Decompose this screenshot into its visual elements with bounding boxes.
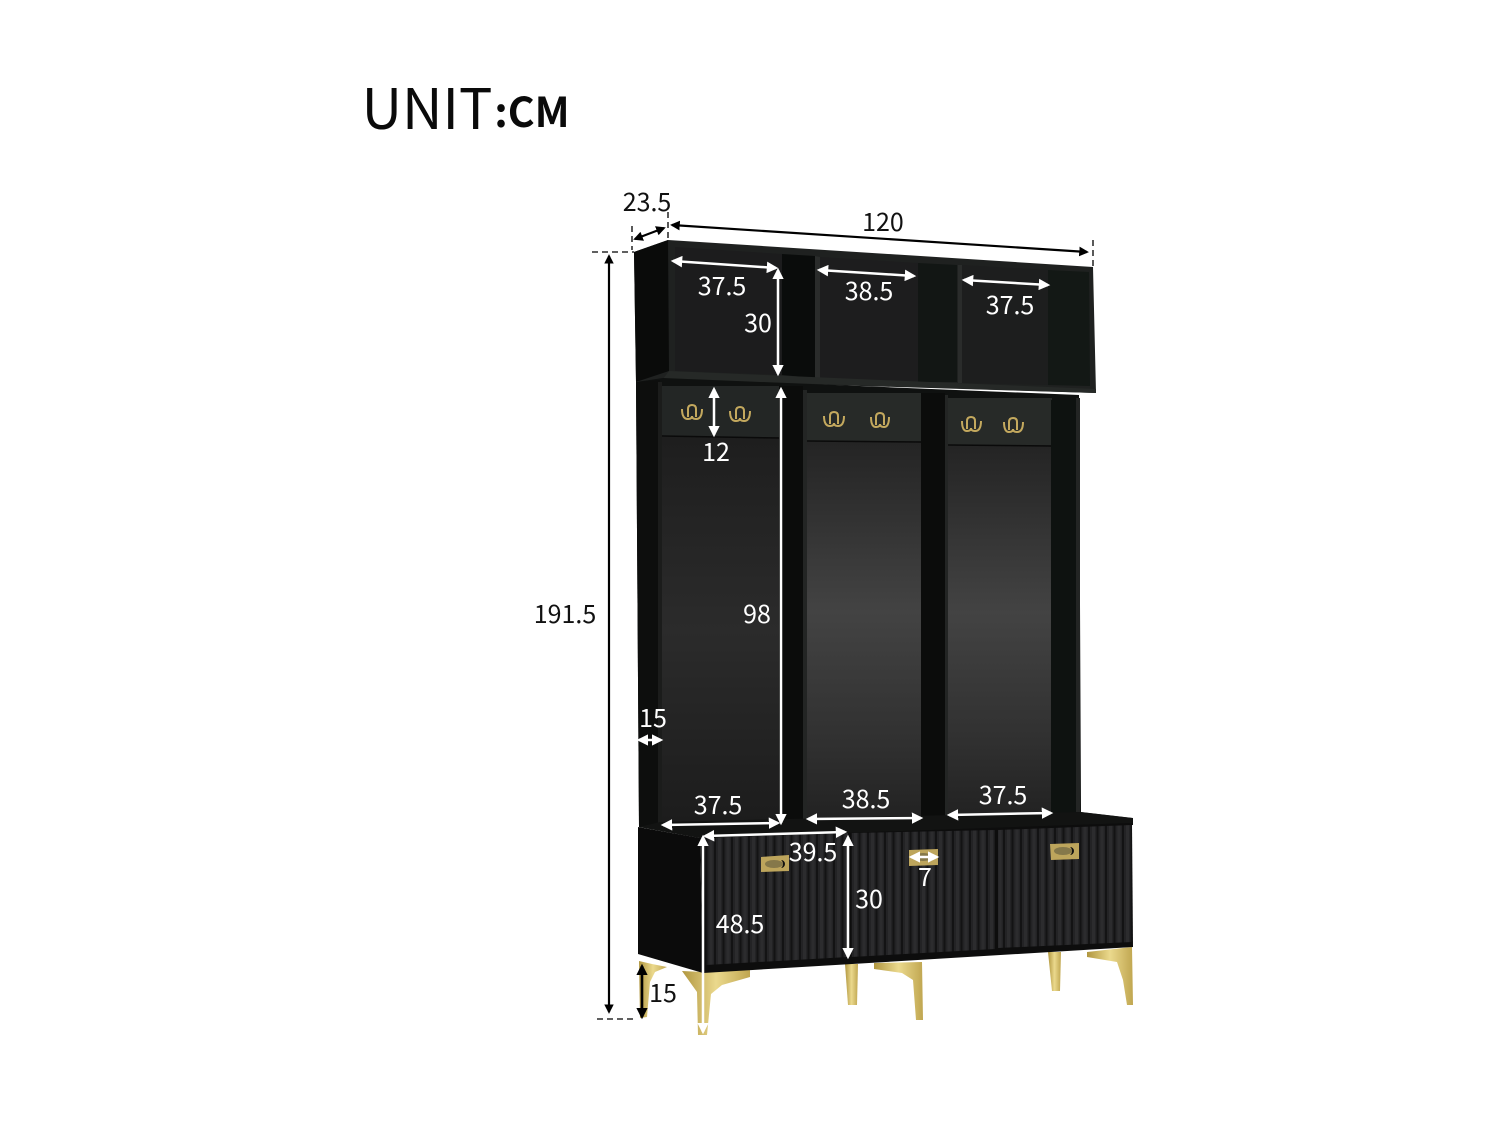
dimension labels: 39.5 [789, 833, 837, 869]
dimension labels: 38.5 [842, 780, 890, 816]
dimension labels: 23.5 [623, 183, 671, 219]
upper cubby unit [634, 240, 1096, 393]
dimension labels: 37.5 [694, 786, 742, 822]
dimension labels: 7 [918, 858, 932, 894]
panel: cabinet [634, 240, 1133, 1035]
title: :CM [494, 79, 570, 139]
dimension labels: 37.5 [979, 776, 1027, 812]
dimension labels: 15 [639, 699, 667, 735]
dimension labels: 48.5 [716, 905, 764, 941]
dimension labels: 38.5 [845, 272, 893, 308]
title: UNIT [362, 65, 492, 146]
dimension labels: 37.5 [698, 267, 746, 303]
dimension labels: 120 [862, 203, 904, 239]
dimension labels: 98 [743, 595, 771, 631]
drawer handles [761, 843, 1079, 872]
black dimension lines [592, 212, 1093, 1019]
white dimension lines [639, 261, 1051, 1032]
dimension labels: 12 [702, 433, 730, 469]
title [362, 65, 570, 146]
lower coat bays [636, 378, 1133, 838]
brass hooks [682, 405, 1023, 432]
dimension labels: 37.5 [986, 286, 1034, 322]
gold legs [639, 947, 1133, 1035]
bench [638, 812, 1133, 973]
dimension labels: 191.5 [534, 595, 596, 631]
dimension labels: 30 [855, 880, 883, 916]
dimension labels: 30 [744, 304, 772, 340]
dimension labels [534, 183, 1034, 1010]
dimension labels: 15 [649, 974, 677, 1010]
